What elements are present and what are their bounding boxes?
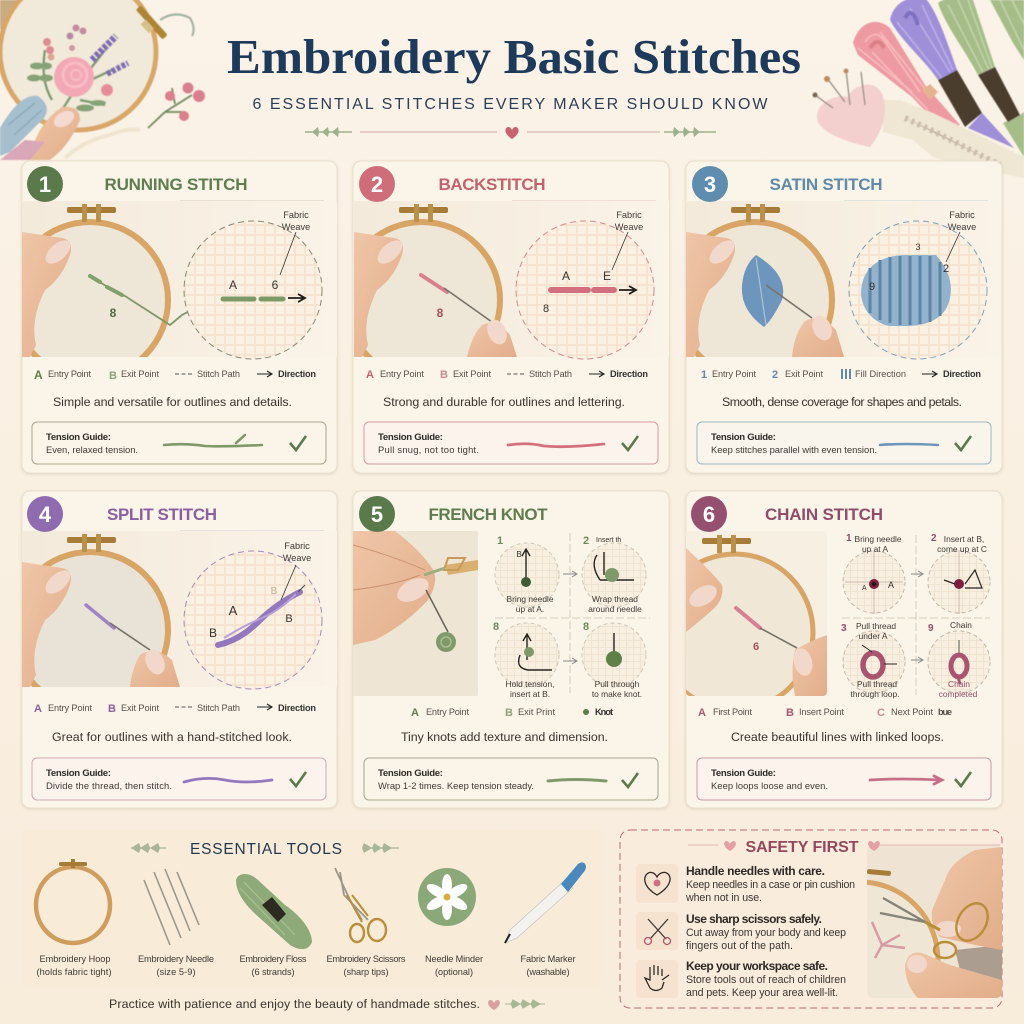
number badge 6 [691, 496, 727, 532]
tool: needle minder: Needle Minder [425, 954, 483, 964]
step diagrams: chain stitch: Insert at B, [944, 534, 984, 544]
number badge 2 [359, 166, 395, 202]
magnified view: backstitch: Fabric [616, 210, 642, 220]
tension guide: Wrap 1-2 times. Keep tension steady. [378, 780, 534, 791]
legend: split stitch: Direction [278, 703, 316, 713]
legend: chain stitch: B [786, 707, 794, 719]
legend: chain stitch [698, 707, 952, 719]
panel: essential tools [22, 830, 601, 987]
tool: embroidery needles: Embroidery Needle [138, 954, 214, 964]
photo: hoop with chain stitch: 6 [753, 641, 759, 653]
number badge 1: 1 [39, 172, 51, 197]
step diagrams: chain stitch: Bring needle [854, 534, 902, 544]
legend: backstitch: B [440, 369, 448, 381]
number badge 5: 5 [371, 502, 383, 527]
safety item: needles: Handle needles with care. [686, 864, 825, 878]
magnified view: split stitch: A [229, 603, 238, 618]
legend: running stitch [34, 368, 316, 382]
magnified view: backstitch: 8 [543, 303, 549, 315]
photo: cutting thread with scissors [867, 846, 1002, 998]
panel: french knot [353, 491, 669, 808]
step diagrams: french knot: to make knot. [592, 689, 642, 699]
step diagrams: french knot: around needle [588, 604, 642, 614]
number badge 6: 6 [703, 502, 715, 527]
number badge 2: 2 [371, 172, 383, 197]
magnified view: running stitch [184, 210, 322, 359]
legend: backstitch [366, 369, 648, 381]
description: Create beautiful lines with linked loops. [731, 730, 944, 744]
legend: french knot: Knot [595, 707, 613, 717]
legend: french knot: Entry Point [426, 707, 469, 717]
legend: satin stitch: 1 [701, 369, 707, 381]
magnified view: running stitch: 6 [272, 278, 279, 292]
number badge 3: 3 [704, 172, 716, 197]
legend: french knot: Exit Print [518, 707, 555, 717]
step diagrams: french knot: 8 [583, 621, 589, 633]
magnified view: split stitch [184, 541, 322, 689]
safety item: scissors: fingers out of the path. [686, 940, 793, 952]
heading: essential tools [131, 841, 399, 858]
tension guide: Keep stitches parallel with even tension. [711, 444, 877, 455]
step diagrams: chain stitch: Chain [948, 679, 970, 689]
heading: essential tools: ESSENTIAL TOOLS [190, 841, 342, 858]
description: Great for outlines with a hand-stitched look. [52, 730, 292, 744]
number badge 1 [27, 166, 63, 202]
step diagrams: french knot: Hold tension, [506, 679, 554, 689]
step diagrams: chain stitch: come up at C [937, 544, 987, 554]
step diagrams: chain stitch: A [888, 580, 894, 590]
number badge 5 [359, 496, 395, 532]
decoration: embroidery hoop with floral design [0, 0, 205, 160]
tool: embroidery floss: Embroidery Floss [240, 954, 307, 964]
legend: running stitch: B [109, 370, 117, 382]
legend: french knot: A [411, 707, 419, 719]
photo: hand making knot [353, 531, 478, 696]
tool: needle minder [418, 868, 483, 977]
panel: safety first [620, 830, 1002, 1024]
step diagrams: chain stitch [841, 533, 990, 699]
tool: needle minder: (optional) [435, 967, 473, 977]
tension guide: Tension Guide: [378, 432, 443, 443]
legend: satin stitch: Exit Point [785, 369, 823, 379]
legend: split stitch: Stitch Path [197, 703, 240, 713]
magnified view: running stitch: Fabric [283, 210, 309, 220]
photo: hoop with split stitch [22, 531, 337, 687]
legend: running stitch: Direction [278, 369, 316, 379]
step diagrams: chain stitch: 3 [841, 623, 847, 634]
panel: satin stitch [676, 161, 1002, 473]
heading: french knot: FRENCH KNOT [428, 505, 548, 524]
footer message: Practice with patience and enjoy the beauty of handmade stitches. [109, 997, 480, 1011]
magnified view: backstitch: A [562, 269, 570, 283]
tension guide [32, 422, 326, 464]
legend: split stitch [34, 703, 316, 715]
photo: hoop with backstitch: 8 [437, 306, 444, 320]
step diagrams: chain stitch: A [862, 585, 867, 592]
step diagrams: french knot: Bring needle [506, 594, 554, 604]
step diagrams: chain stitch: Chain [950, 620, 972, 630]
safety item: workspace: Keep your workspace safe. [686, 959, 828, 973]
tool: embroidery hoop [36, 859, 112, 977]
legend: backstitch: A [366, 369, 374, 381]
step diagrams: french knot: 8 [493, 621, 499, 633]
step diagrams: chain stitch: up at A [862, 544, 888, 554]
panel: running stitch [12, 161, 337, 473]
tension guide: Tension Guide: [711, 432, 776, 443]
tool: embroidery scissors: (sharp tips) [344, 967, 388, 977]
tension guide [364, 422, 658, 464]
tool: embroidery hoop: (holds fabric tight) [36, 967, 112, 977]
tension guide [364, 758, 658, 800]
legend: chain stitch: A [698, 707, 706, 719]
tool: embroidery scissors: Embroidery Scissors [326, 954, 406, 964]
tool: fabric marker: (washable) [526, 967, 570, 977]
decoration: thread skeins, pincushion and lace [812, 0, 1024, 178]
legend: backstitch: Stitch Path [529, 369, 572, 379]
heading: safety first: SAFETY FIRST [746, 839, 859, 856]
heading: safety first [688, 839, 1000, 856]
photo: hoop with running stitch [22, 201, 337, 357]
legend: satin stitch: 2 [772, 369, 778, 381]
legend: satin stitch: Direction [943, 369, 981, 379]
step diagrams: chain stitch: 1 [846, 533, 852, 544]
safety item: scissors: Cut away from your body and keep [686, 927, 846, 939]
tool: embroidery needles: (size 5-9) [156, 967, 196, 977]
safety item: needles: Keep needles in a case or pin cushion [686, 879, 855, 891]
description: Simple and versatile for outlines and details. [53, 395, 292, 409]
step diagrams: chain stitch: 9 [928, 623, 934, 634]
tension guide: Tension Guide: [378, 768, 443, 779]
legend: chain stitch: C [877, 707, 885, 719]
photo: hoop with satin leaf [686, 201, 988, 357]
step diagrams: chain stitch: Pull thread [857, 679, 897, 689]
step diagrams: chain stitch: completed [939, 689, 978, 699]
safety item: scissors [636, 912, 846, 952]
tension guide [697, 758, 991, 800]
description: Smooth, dense coverage for shapes and petals. [722, 395, 962, 409]
safety item: workspace: and pets. Keep your area well-lit. [686, 987, 838, 999]
heading: split stitch: SPLIT STITCH [107, 505, 217, 524]
legend: french knot: B [505, 707, 513, 719]
legend: backstitch: Exit Point [453, 369, 491, 379]
step diagrams: french knot: insert at B. [510, 689, 550, 699]
step diagrams: chain stitch: under A [859, 631, 888, 641]
magnified view: satin stitch: 2 [943, 263, 949, 275]
magnified view: satin stitch: Weave [948, 222, 976, 232]
heading: running stitch: RUNNING STITCH [104, 175, 248, 194]
tension guide [32, 758, 326, 800]
tension guide: Tension Guide: [711, 768, 776, 779]
legend: running stitch: Exit Point [121, 369, 159, 379]
step diagrams: french knot: B [516, 550, 522, 559]
tension guide: Pull snug, not too tight. [378, 444, 479, 455]
legend: chain stitch: Insert Point [799, 707, 844, 717]
tool: fabric marker: Fabric Marker [520, 954, 576, 964]
magnified view: running stitch: A [229, 278, 237, 292]
tool: fabric marker [505, 862, 586, 977]
legend: satin stitch [701, 369, 981, 381]
legend: chain stitch: bue [938, 707, 952, 717]
tension guide: Keep loops loose and even. [711, 780, 828, 791]
legend: running stitch: Stitch Path [197, 369, 240, 379]
legend: backstitch: Direction [610, 369, 648, 379]
panel: backstitch [344, 161, 669, 473]
tension guide: Tension Guide: [46, 768, 111, 779]
photo: hoop with chain stitch [686, 534, 827, 696]
legend: chain stitch: Next Point [891, 707, 933, 717]
photo: hoop with running stitch: 8 [110, 306, 117, 320]
heading: satin stitch: SATIN STITCH [770, 175, 882, 194]
tension guide: Divide the thread, then stitch. [46, 780, 172, 791]
safety item: needles: when not in use. [685, 892, 762, 904]
magnified view: split stitch: B [271, 586, 278, 597]
legend: split stitch: A [34, 703, 42, 715]
step diagrams: french knot: 2 [583, 535, 589, 547]
tension guide: Even, relaxed tension. [46, 444, 138, 455]
tool: embroidery floss: (6 strands) [252, 967, 294, 977]
step diagrams: chain stitch: through loop. [851, 689, 899, 699]
step diagrams: french knot: up at A. [516, 604, 544, 614]
legend: backstitch: Entry Point [380, 369, 424, 379]
description: Strong and durable for outlines and lettering. [383, 395, 625, 409]
step diagrams: french knot: Pull through [595, 679, 640, 689]
title: Embroidery Basic Stitches [227, 29, 801, 84]
tool: embroidery floss [236, 874, 312, 977]
subtitle: 6 ESSENTIAL STITCHES EVERY MAKER SHOULD KNOW [252, 96, 768, 113]
legend: split stitch: Exit Point [121, 703, 159, 713]
magnified view: satin stitch: Fabric [949, 210, 975, 220]
legend: chain stitch: First Point [713, 707, 752, 717]
step diagrams: french knot: Wrap thread [592, 594, 638, 604]
step diagrams: chain stitch: 2 [931, 533, 937, 544]
magnified view: backstitch: Weave [615, 222, 643, 232]
step diagrams: chain stitch: Pull thread [856, 621, 896, 631]
magnified view: split stitch: B [285, 613, 293, 625]
tension guide [697, 422, 991, 464]
magnified view: backstitch [516, 210, 654, 359]
tool: embroidery needles [138, 869, 214, 977]
number badge 3 [692, 166, 728, 202]
heading: backstitch: BACKSTITCH [438, 175, 546, 194]
photo: hoop with backstitch [354, 201, 669, 357]
number badge 4: 4 [39, 502, 52, 527]
safety item: workspace: Store tools out of reach of children [686, 974, 846, 986]
step diagrams: french knot: Insert th [596, 537, 621, 544]
tool: embroidery scissors [326, 868, 406, 977]
magnified view: split stitch: B [209, 626, 217, 640]
magnified view: satin stitch: 9 [869, 281, 875, 293]
step diagrams: french knot: 1 [497, 535, 503, 547]
safety item: scissors: Use sharp scissors safely. [686, 912, 822, 926]
panel: chain stitch [657, 491, 1002, 808]
magnified view: split stitch: Weave [283, 553, 311, 563]
magnified view: running stitch: Weave [282, 222, 310, 232]
tool: embroidery hoop: Embroidery Hoop [40, 954, 110, 964]
legend: split stitch: B [108, 703, 116, 715]
legend: running stitch: A [34, 368, 43, 382]
magnified view: satin stitch [849, 210, 987, 359]
safety item: needles [636, 864, 855, 904]
magnified view: satin stitch: 3 [915, 242, 921, 252]
safety item: workspace [636, 959, 846, 999]
legend: running stitch: Entry Point [48, 369, 91, 379]
legend: satin stitch: Entry Point [712, 369, 756, 379]
description: Tiny knots add texture and dimension. [401, 730, 608, 744]
heading: chain stitch: CHAIN STITCH [765, 505, 883, 524]
step diagrams: french knot [493, 533, 650, 699]
magnified view: backstitch: E [603, 269, 611, 283]
panel: split stitch [12, 491, 337, 808]
legend: split stitch: Entry Point [48, 703, 92, 713]
magnified view: split stitch: Fabric [284, 541, 310, 551]
number badge 4 [27, 496, 63, 532]
tension guide: Tension Guide: [46, 432, 111, 443]
legend: satin stitch: Fill Direction [855, 369, 906, 379]
legend: french knot [411, 707, 613, 719]
divider with heart and leaves [305, 127, 716, 139]
